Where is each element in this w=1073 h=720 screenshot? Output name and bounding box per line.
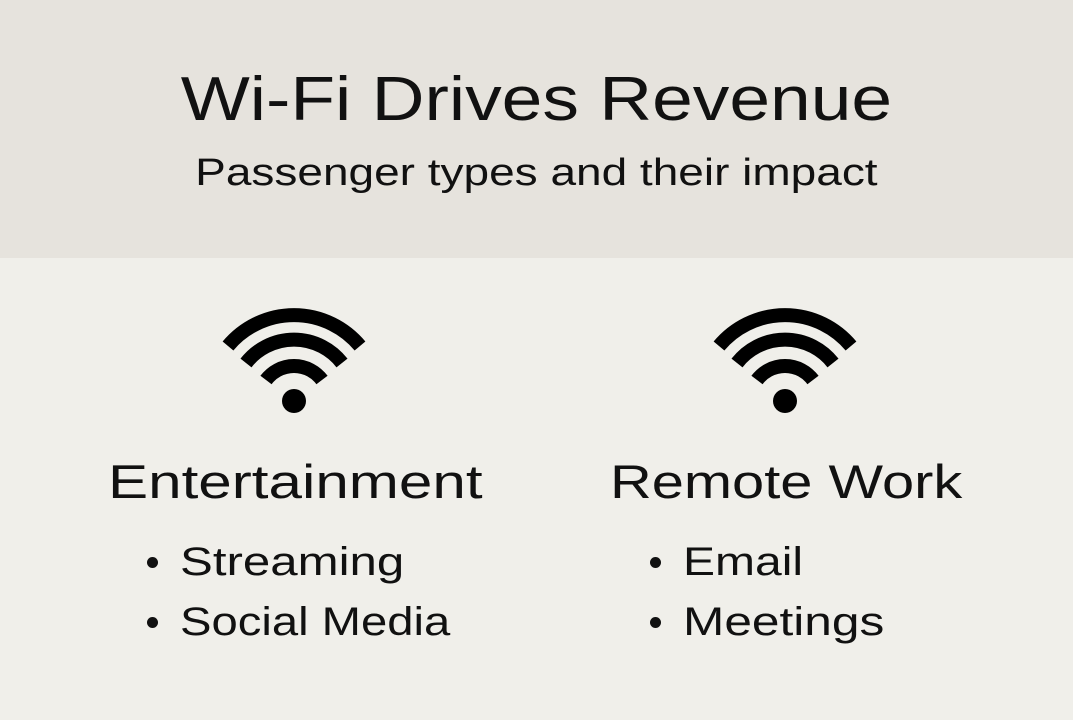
bullet list xyxy=(650,540,884,644)
heading: Entertainment xyxy=(108,455,483,508)
bullet list: Meetings xyxy=(683,600,884,644)
heading: Remote Work xyxy=(610,455,962,508)
icon: wifi xyxy=(714,308,856,413)
bullet list xyxy=(147,540,450,644)
bullet list: Streaming xyxy=(180,540,404,584)
panel: remote work xyxy=(610,308,962,644)
bullet list: Email xyxy=(683,540,803,584)
subtitle: Passenger types and their impact xyxy=(195,152,878,194)
bullet list: Social Media xyxy=(180,600,450,644)
panel: entertainment xyxy=(108,308,483,644)
icon: wifi xyxy=(222,308,366,413)
title: Wi-Fi Drives Revenue xyxy=(181,65,892,134)
header band xyxy=(0,0,1073,258)
